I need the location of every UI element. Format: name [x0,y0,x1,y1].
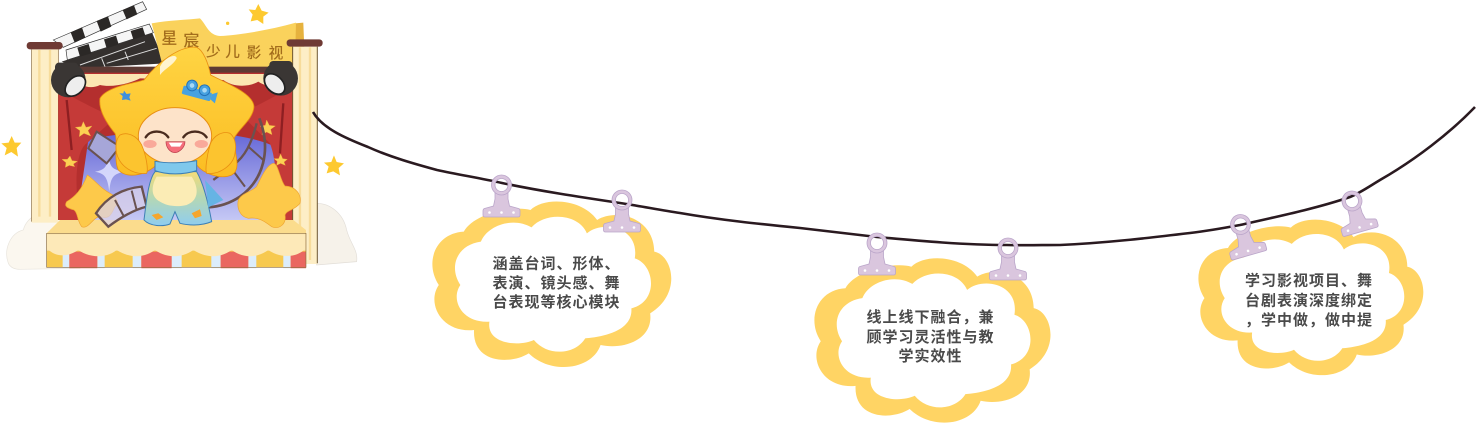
cloud 3 shape [1198,220,1423,375]
red curtain backdrop [58,72,293,220]
small stage stars [62,120,287,167]
illustration: star mascot on stage [1,2,357,269]
cloud right [317,203,357,265]
text block 1: 表演、镜头感、舞 [492,274,621,292]
stage [47,220,306,268]
text block 3: ，学中做，做中提 [1245,311,1373,329]
cloud left [7,210,80,269]
clip 2b [990,238,1026,280]
panel: cloud card 1 [432,175,671,367]
big star left [66,175,117,227]
spotlights [51,61,298,100]
text block 2: 学实效性 [898,347,963,365]
banner: 影 [247,43,262,61]
banner: 星 [161,29,177,47]
right column [287,39,323,264]
text block 2: 线上线下融合，兼 [866,308,995,326]
clip 1a [483,175,520,217]
banner [152,18,305,68]
text block 1: 台表现等核心模块 [492,293,621,311]
cloud 2 shape [814,258,1050,423]
clip 3b [1331,186,1379,237]
banner: 视 [269,45,284,62]
beam [57,67,294,73]
banner: 少 [206,44,221,61]
film strip front [96,187,147,227]
clip 3a [1220,210,1267,260]
panel: cloud card 2 [814,233,1050,423]
stars around stage [1,4,344,175]
film strip behind mascot [88,118,265,207]
valance [82,74,288,88]
text block 3: 台剧表演深度绑定 [1245,292,1373,310]
clip 1b [604,190,640,232]
big star right [238,163,300,228]
panel: cloud card 3 [1198,186,1423,375]
clapperboard [53,2,165,68]
text block 2: 顾学习灵活性与教 [866,328,995,346]
clip 2a [858,233,896,275]
rope [313,107,1475,245]
left column [27,42,63,223]
cloud 1 shape [432,202,671,367]
text block 3: 学习影视项目、舞 [1245,272,1373,290]
mascot [100,47,254,226]
text block 1: 涵盖台词、形体、 [492,254,621,272]
banner: 宸 [183,32,199,50]
banner: 儿 [225,44,240,61]
